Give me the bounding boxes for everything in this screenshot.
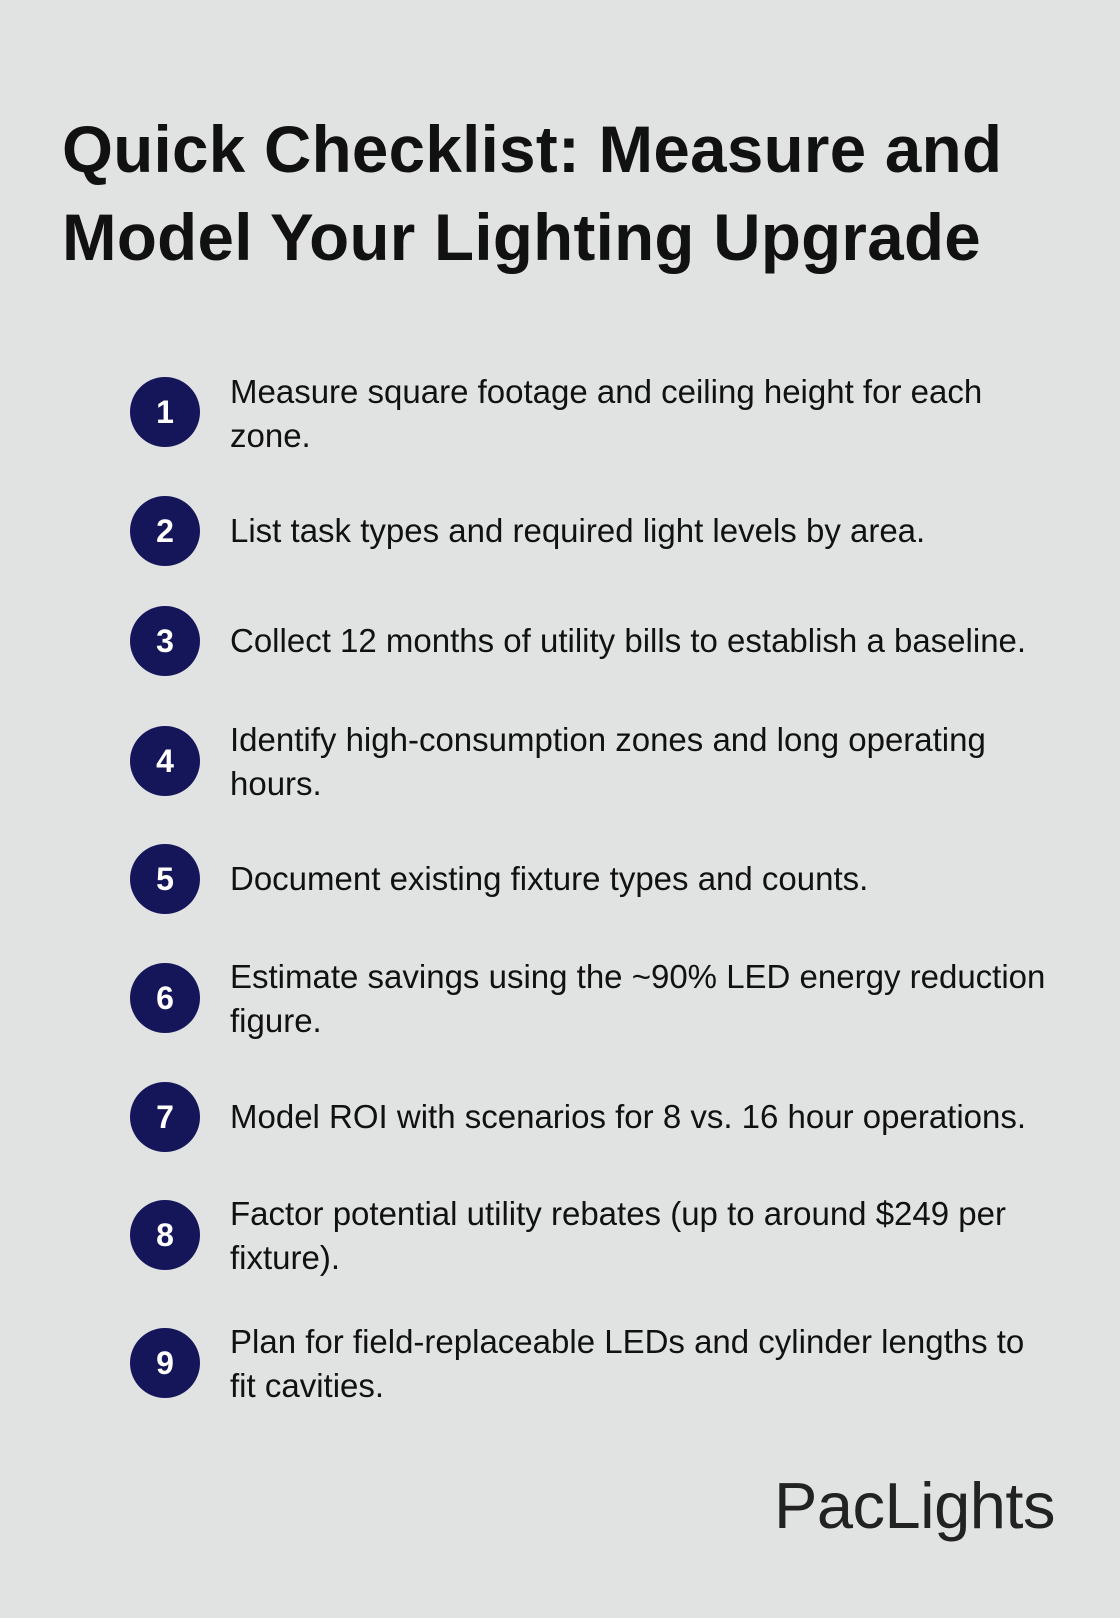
item 7 [130,1082,1026,1152]
item 2 [130,496,925,566]
title: Quick Checklist: Measure and [62,113,1002,186]
item 8: 8 [156,1217,174,1253]
item 9: Plan for field-replaceable LEDs and cylinder lengths to fit cavities. [230,1323,1024,1404]
logo: PacLights [774,1469,1055,1542]
item 9: 9 [156,1345,174,1381]
item 5: 5 [156,861,174,897]
item 5 [130,844,868,914]
title: Model Your Lighting Upgrade [62,201,981,274]
item 2: 2 [156,513,174,549]
item 5: Document existing fixture types and counts. [230,860,868,897]
item 8: Factor potential utility rebates (up to around $249 per fixture). [230,1195,1006,1276]
item 1: Measure square footage and ceiling height for each zone. [230,373,982,454]
item 3 [130,606,1026,676]
item 7: 7 [156,1099,174,1135]
item 6: 6 [156,980,174,1016]
item 7: Model ROI with scenarios for 8 vs. 16 hour operations. [230,1098,1026,1135]
item 2: List task types and required light levels by area. [230,512,925,549]
item 4: 4 [156,743,174,779]
item 1: 1 [156,394,174,430]
item 4: Identify high-consumption zones and long operating hours. [230,721,986,802]
item 3: Collect 12 months of utility bills to establish a baseline. [230,622,1026,659]
item 3: 3 [156,623,174,659]
title [62,113,1002,274]
item 6: Estimate savings using the ~90% LED energy reduction figure. [230,958,1045,1039]
